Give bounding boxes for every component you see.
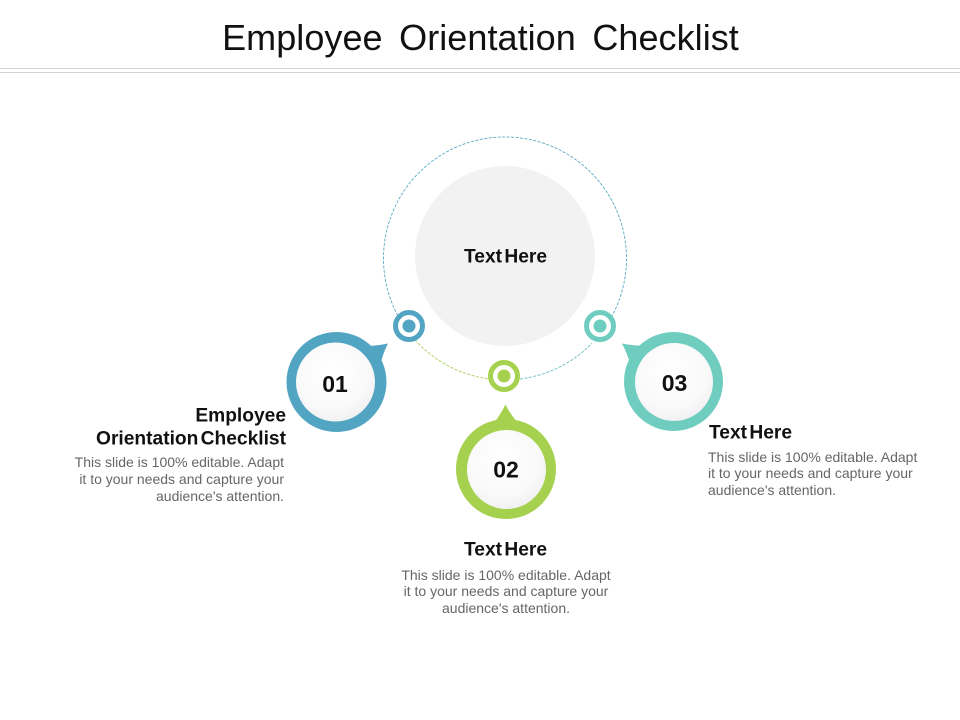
text block 01: audience's attention.	[156, 488, 284, 504]
text block 01: Orientation Checklist	[96, 428, 287, 450]
dashed orbit	[383, 137, 626, 379]
marker 03: 03	[662, 370, 687, 396]
text block 01	[75, 406, 287, 504]
text block 02: This slide is 100% editable. Adapt	[401, 567, 611, 583]
text block 01: This slide is 100% editable. Adapt	[75, 454, 284, 470]
text block 01: it to your needs and capture your	[79, 471, 284, 487]
text block 02: Text Here	[464, 540, 547, 560]
text block 03	[708, 422, 917, 498]
marker 03	[622, 332, 723, 431]
center circle	[415, 166, 595, 346]
text block 02	[401, 540, 611, 616]
text block 02: it to your needs and capture your	[404, 583, 609, 599]
text block 03: Text Here	[709, 422, 792, 444]
text block 03: audience's attention.	[708, 482, 836, 498]
node: blue	[396, 312, 422, 340]
title: Employee Orientation Checklist	[222, 17, 739, 58]
center circle: Text Here	[464, 246, 547, 268]
text block 01: Employee	[195, 406, 286, 426]
text block 02: audience's attention.	[442, 600, 570, 616]
header rule	[0, 68, 960, 72]
marker 02: 02	[493, 456, 519, 482]
node: green	[490, 362, 518, 390]
text block 03: This slide is 100% editable. Adapt	[708, 449, 917, 465]
marker 01: 01	[322, 371, 348, 397]
text block 03: it to your needs and capture your	[708, 465, 913, 481]
marker 01	[286, 332, 388, 432]
marker 02	[456, 404, 556, 519]
node: teal	[586, 312, 614, 340]
